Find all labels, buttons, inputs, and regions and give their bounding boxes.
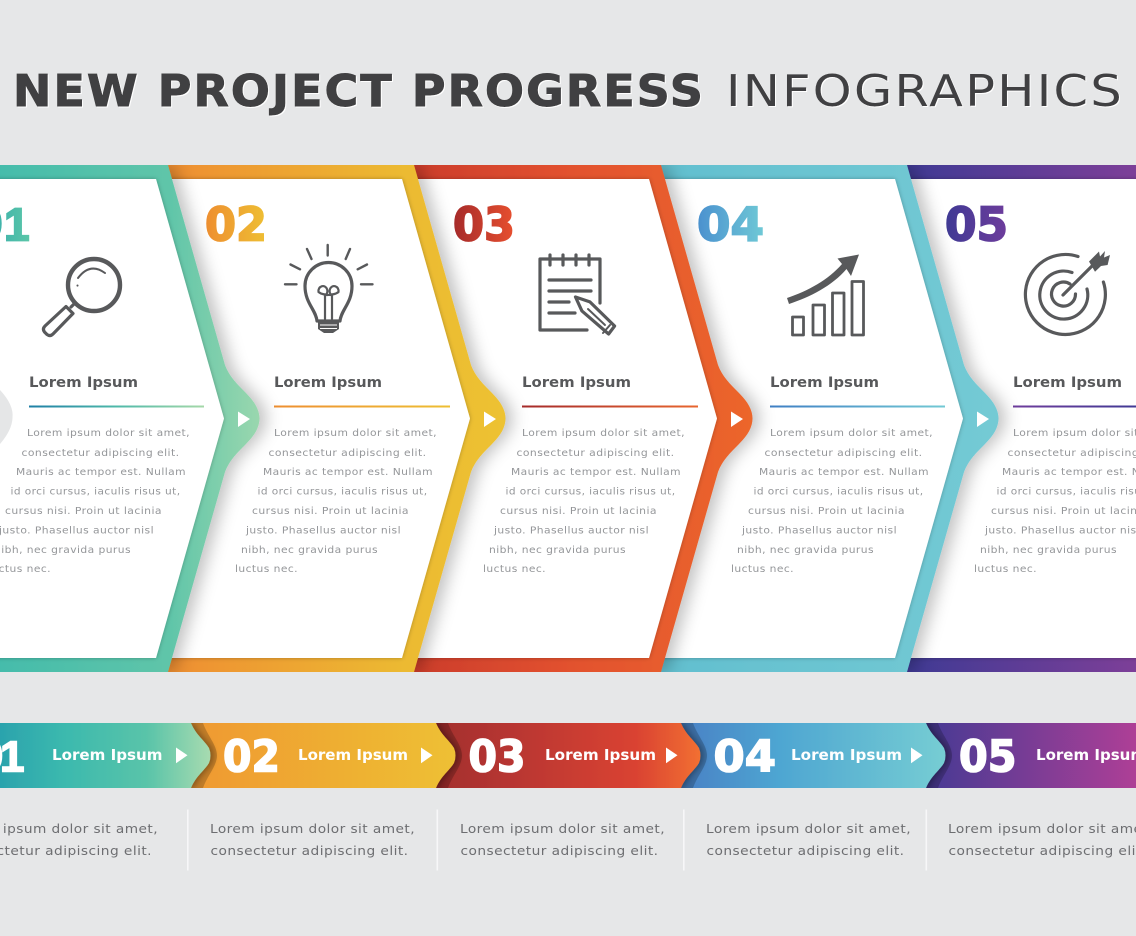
heading: Lorem Ipsum: [1013, 375, 1122, 391]
body text: id orci cursus, iaculis risus ut,: [10, 486, 180, 498]
body text: id orci cursus, iaculis risus ut,: [754, 486, 924, 498]
ribbon segment 4: [675, 723, 952, 788]
body text: Mauris ac tempor est. Nullam: [759, 467, 929, 478]
body text: luctus nec.: [974, 564, 1037, 575]
body text: [731, 428, 933, 575]
body text: cursus nisi. Proin ut lacinia: [500, 506, 657, 517]
underline: [29, 406, 204, 408]
body text: nibh, nec gravida purus: [489, 545, 626, 556]
number 02: 02: [205, 198, 267, 252]
panel 1: magnifier: [0, 165, 260, 672]
underline: [1013, 406, 1136, 408]
body text: Lorem ipsum dolor sit amet,: [522, 428, 685, 439]
ribbon segment 1: [0, 723, 217, 788]
body text: luctus nec.: [731, 564, 794, 575]
body text: justo. Phasellus auctor nisl: [984, 526, 1136, 536]
title: INFOGRAPHICS: [726, 66, 1124, 117]
caption 5: [948, 821, 1136, 858]
body text: consectetur adipiscing elit.: [516, 448, 674, 459]
body text: Mauris ac tempor est. Nullam: [16, 467, 186, 478]
icon: target with arrow: [1025, 251, 1110, 334]
caption 4: [706, 821, 911, 858]
icon: notepad and pencil: [540, 255, 615, 334]
body text: [974, 428, 1136, 575]
caption 4: consectetur adipiscing elit.: [706, 843, 904, 858]
panel 4: growth chart: [661, 165, 1013, 672]
body text: cursus nisi. Proin ut lacinia: [991, 506, 1136, 517]
panel 3: notepad: [414, 165, 767, 672]
body text: consectetur adipiscing elit.: [22, 448, 180, 459]
body text: consectetur adipiscing elit.: [268, 448, 426, 459]
icon: light bulb: [285, 245, 372, 333]
body text: justo. Phasellus auctor nisl: [245, 526, 401, 536]
body text: justo. Phasellus auctor nisl: [493, 526, 649, 536]
ribbon segment 4: Lorem Ipsum: [791, 746, 902, 764]
body text: Mauris ac tempor est. Nullam: [263, 467, 433, 478]
underline: [274, 406, 450, 408]
ribbon segment 5: [926, 723, 1136, 788]
body text: nibh, nec gravida purus: [980, 545, 1117, 556]
number 04: 04: [697, 198, 764, 252]
body text: justo. Phasellus auctor nisl: [741, 526, 897, 536]
panel 5: target: [907, 165, 1136, 672]
ribbon segment 2: 02: [223, 732, 280, 782]
body text: Lorem ipsum dolor sit amet,: [27, 428, 190, 439]
ribbon segment 2: Lorem Ipsum: [298, 746, 408, 764]
ribbon segment 3: 03: [468, 732, 526, 782]
body text: cursus nisi. Proin ut lacinia: [5, 506, 162, 517]
body text: id orci cursus, iaculis risus ut,: [258, 486, 428, 498]
caption 3: Lorem ipsum dolor sit amet,: [460, 821, 665, 836]
heading: Lorem Ipsum: [770, 375, 879, 391]
caption 2: consectetur adipiscing elit.: [210, 843, 408, 858]
body text: Mauris ac tempor est. Nullam: [511, 467, 681, 478]
number 03: 03: [453, 198, 515, 252]
body text: Lorem ipsum dolor sit amet,: [770, 428, 933, 439]
panel 2: light bulb: [168, 165, 520, 672]
heading: Lorem Ipsum: [274, 375, 382, 391]
title: [13, 66, 1124, 117]
body text: nibh, nec gravida purus: [737, 545, 874, 556]
ribbon segment 4: 04: [714, 732, 776, 782]
caption 2: Lorem ipsum dolor sit amet,: [210, 821, 415, 836]
icon: magnifying glass: [43, 259, 120, 336]
body text: luctus nec.: [483, 564, 546, 575]
body text: justo. Phasellus auctor nisl: [0, 526, 154, 536]
caption 3: consectetur adipiscing elit.: [460, 843, 658, 858]
body text: id orci cursus, iaculis risus ut,: [506, 486, 676, 498]
icon: bar chart with arrow: [787, 254, 864, 335]
underline: [522, 406, 698, 408]
ribbon segment 5: 05: [959, 732, 1016, 782]
ribbon segment 1: 1: [0, 732, 24, 782]
ribbon segment 3: Lorem Ipsum: [545, 746, 656, 764]
heading: Lorem Ipsum: [29, 375, 138, 391]
underline: [770, 406, 945, 408]
body text: cursus nisi. Proin ut lacinia: [252, 506, 409, 517]
caption 3: [460, 821, 665, 858]
body text: [235, 428, 437, 575]
caption 2: [210, 821, 415, 858]
number 01: 1: [4, 198, 30, 250]
number 05: 05: [945, 198, 1008, 252]
heading: Lorem Ipsum: [522, 375, 631, 391]
body text: cursus nisi. Proin ut lacinia: [748, 506, 905, 517]
caption 1: [0, 821, 158, 858]
body text: nibh, nec gravida purus: [241, 545, 378, 556]
body text: [0, 428, 190, 575]
dividers: [187, 810, 927, 870]
caption 4: Lorem ipsum dolor sit amet,: [706, 821, 911, 836]
body text: luctus nec.: [235, 564, 298, 575]
caption 5: Lorem ipsum dolor sit amet,: [948, 821, 1136, 836]
ribbon segment 1: Lorem Ipsum: [52, 746, 162, 764]
ribbon segment 3: [430, 723, 707, 788]
body text: [483, 428, 685, 575]
body text: Lorem ipsum dolor sit amet,: [274, 428, 437, 439]
body text: consectetur adipiscing elit.: [764, 448, 922, 459]
caption 5: consectetur adipiscing elit.: [948, 843, 1136, 858]
ribbon segment 2: [185, 723, 462, 788]
title: NEW PROJECT PROGRESS: [13, 66, 705, 117]
